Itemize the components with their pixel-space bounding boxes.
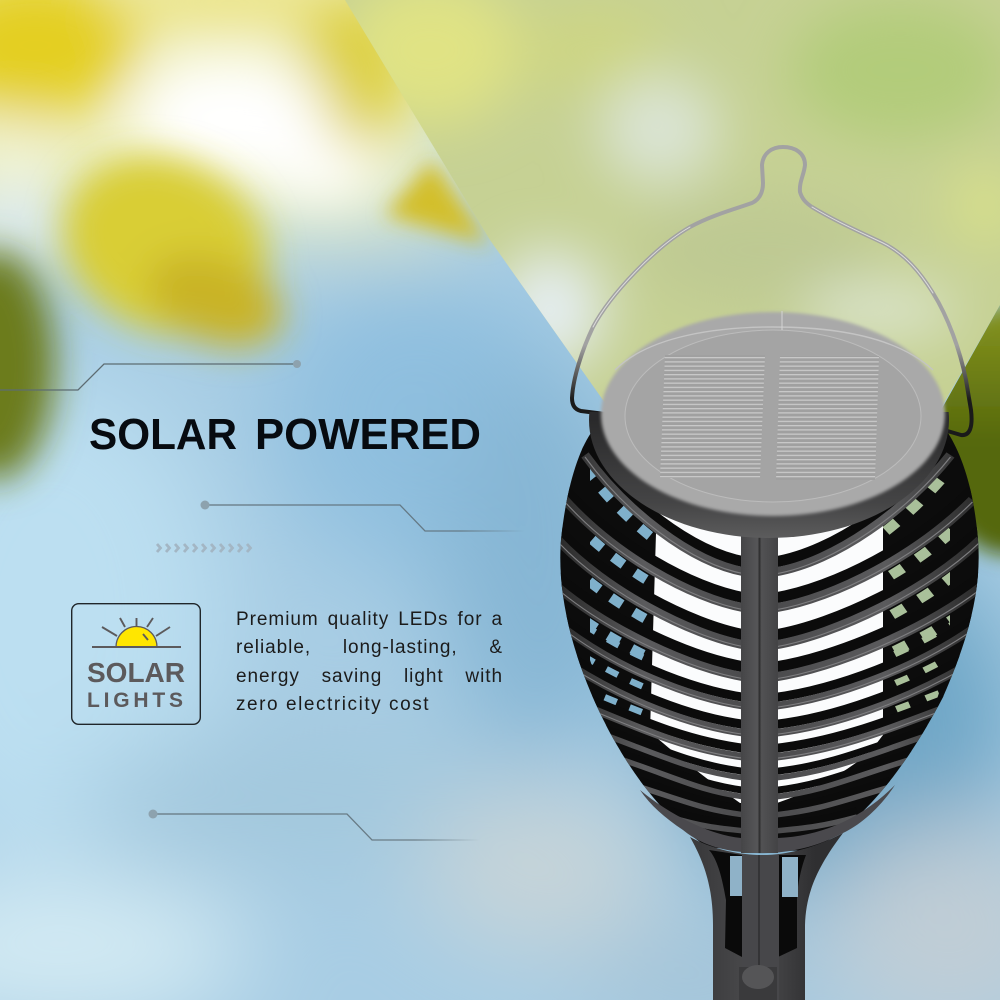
lamp: glowing white cylinder: [650, 500, 883, 803]
decorative line bottom: [148, 810, 480, 840]
lamp: bottom cup: [640, 785, 895, 853]
solar cell left: [660, 355, 765, 478]
description text: reliable, long-lasting, &: [236, 637, 503, 658]
solar cell right: [776, 356, 879, 480]
centre column: [742, 855, 779, 1000]
icon: solar lights badge: [72, 604, 200, 724]
stem window left: [709, 850, 742, 957]
lamp: outer grey ribs: [555, 455, 983, 831]
title: POWERED: [255, 410, 481, 459]
lamp: rib highlights: [555, 457, 983, 758]
description text: zero electricity cost: [236, 694, 430, 715]
decorative line middle: [200, 500, 525, 531]
title: SOLAR: [89, 410, 237, 459]
stem window right: [778, 855, 806, 957]
title: [89, 410, 481, 459]
lamp: solar panel lid: [601, 311, 945, 516]
lamp: rim below solar lid: [589, 412, 949, 538]
decorative chevrons: [157, 544, 250, 552]
description text: Premium quality LEDs for a: [236, 609, 503, 630]
lamp: torch head cage: [550, 420, 990, 860]
description text: [236, 609, 503, 715]
icon: solar lights badge: LIGHTS: [87, 689, 183, 712]
lamp: centre spine: [741, 525, 778, 853]
lamp: side openings left: [590, 469, 653, 716]
lamp: wire hanging handle: [572, 147, 972, 435]
lamp: side openings right: [883, 478, 950, 712]
background: light beam from the solar panel: [345, 0, 1000, 406]
lamp: inner black rib edges: [560, 446, 978, 794]
lamp: stem and spike: [690, 833, 843, 1000]
background: dark green corner foliage: [942, 305, 1000, 570]
description text: energy saving light with: [236, 666, 503, 687]
decorative line top left: [0, 360, 301, 390]
stem knob: [739, 967, 777, 1000]
icon: solar lights badge: SOLAR: [87, 657, 185, 688]
